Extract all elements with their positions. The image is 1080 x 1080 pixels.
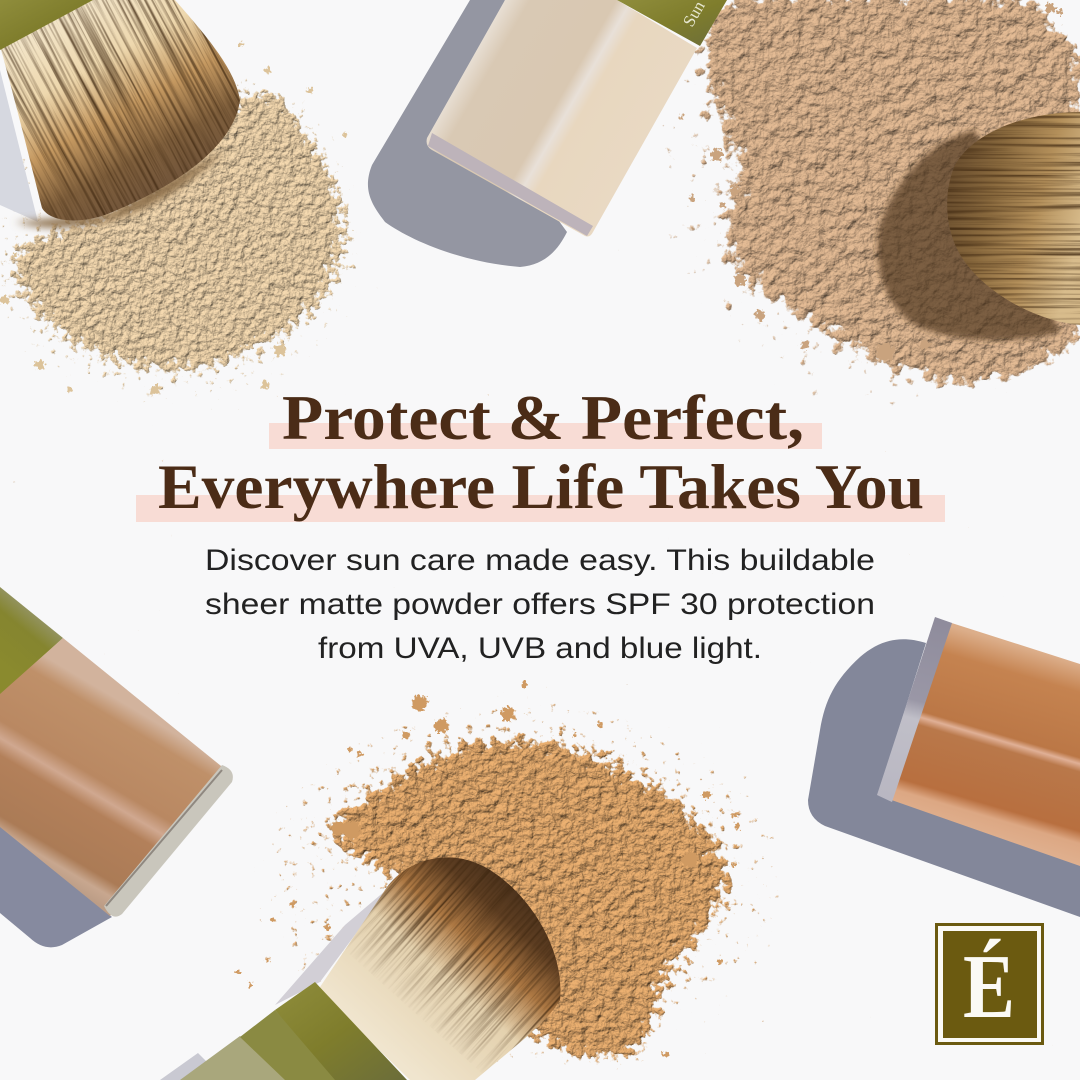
handle shadow [160,1053,225,1080]
jar: top centre [368,0,727,267]
body text: Discover sun care made easy. This buildable [205,544,875,577]
jar shadow [0,826,112,947]
powder: medium shade top right [660,0,1080,400]
brush shadow on powder [877,130,1060,340]
handle collar [240,1010,340,1080]
jar shadow [368,0,567,267]
bristles [0,0,240,220]
brush shadow [275,885,392,1005]
jar: right [808,617,1080,917]
title highlight bars [136,423,945,522]
jar: left [0,587,233,947]
powder clumps: top left [1,42,348,395]
jar base [104,765,233,917]
logo [935,923,1044,1045]
jar rim [428,133,593,236]
bristle strands [940,108,1080,330]
ferrule [275,982,407,1080]
brush: bottom centre [160,857,560,1080]
bristle strands [350,858,560,1068]
handle base [180,1036,290,1080]
title: Everywhere Life Takes You [158,452,924,522]
powder clumps: bottom centre [236,682,740,1058]
bristle strands [1,0,240,220]
powder: light shade top left [0,70,365,410]
title [158,383,924,522]
jar rim highlight [106,770,222,906]
jar cap [617,0,727,46]
ferrule [0,0,93,50]
jar rim [877,617,952,802]
bristles [318,857,560,1080]
jar shadow [808,639,1080,917]
brush: right [877,108,1080,340]
jar body [0,638,226,916]
bristles [947,112,1080,325]
logo: É [963,936,1015,1037]
jar body [427,0,697,236]
contact shadow [15,150,225,228]
body text: sheer matte powder offers SPF 30 protection [205,588,875,621]
powder clumps: top right [680,3,1063,361]
jar cap [0,587,63,695]
title: Protect & Perfect, [282,383,804,453]
brush: top left [0,0,240,234]
jar body [880,618,1080,866]
brush shadow [0,70,38,222]
body text [205,544,875,665]
powder: deep shade bottom centre [255,695,785,1065]
body text: from UVA, UVB and blue light. [318,632,762,665]
